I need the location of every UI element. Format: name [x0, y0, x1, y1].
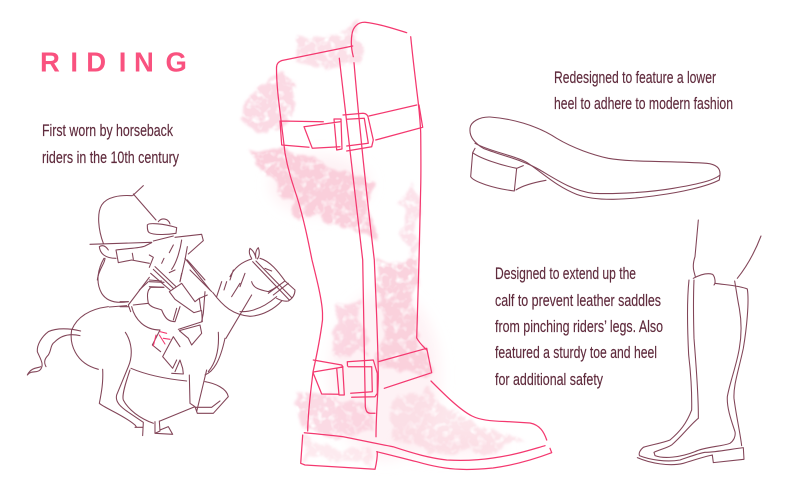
text: calf design note: for additional safety — [495, 370, 603, 389]
boot sole — [637, 448, 744, 465]
rider belly — [98, 258, 128, 302]
text: heel redesign note: Redesigned to feature a lower — [554, 68, 716, 87]
saddle red accent — [153, 332, 170, 346]
text: calf design note: calf to prevent leather saddles — [495, 291, 661, 310]
horse tail — [27, 329, 81, 375]
text: calf design note: Designed to extend up the — [495, 264, 636, 283]
horse ears — [249, 248, 259, 259]
shoe sole — [475, 143, 720, 199]
rider upper body and helmet — [90, 186, 210, 290]
horse body and legs — [27, 248, 295, 436]
icon: boot on leg — [637, 220, 761, 465]
main boot illustration — [276, 22, 552, 470]
boot top and right outline — [351, 22, 547, 440]
boot left outline — [276, 46, 353, 431]
boot heel — [301, 435, 377, 469]
boot inner seams — [339, 58, 378, 437]
text: heel redesign note: heel to adhere to modern fashion — [554, 94, 733, 113]
shoe heel — [471, 148, 546, 191]
boot sole — [304, 433, 552, 470]
upper buckle strap — [280, 105, 423, 151]
text: heel redesign note — [554, 68, 733, 113]
title: RIDING — [40, 47, 187, 78]
text: calf design note — [495, 264, 663, 389]
text: calf design note: from pinching riders’ legs. Also — [495, 317, 663, 336]
icon: shoe profile with lower heel — [470, 117, 720, 199]
icon: horse and rider — [27, 186, 295, 436]
shoe upper — [470, 117, 720, 194]
lower buckle strap — [313, 348, 432, 397]
rider lower body and boot — [120, 270, 212, 374]
horse neck and head — [213, 258, 295, 338]
boot shaft — [639, 274, 748, 457]
text: origin note — [42, 121, 179, 167]
text: origin note: riders in the 10th century — [42, 148, 179, 167]
text: calf design note: featured a sturdy toe and heel — [495, 343, 657, 362]
text: origin note: First worn by horseback — [42, 121, 173, 140]
leg lines — [693, 220, 761, 278]
watercolor splash behind boot — [246, 24, 522, 466]
